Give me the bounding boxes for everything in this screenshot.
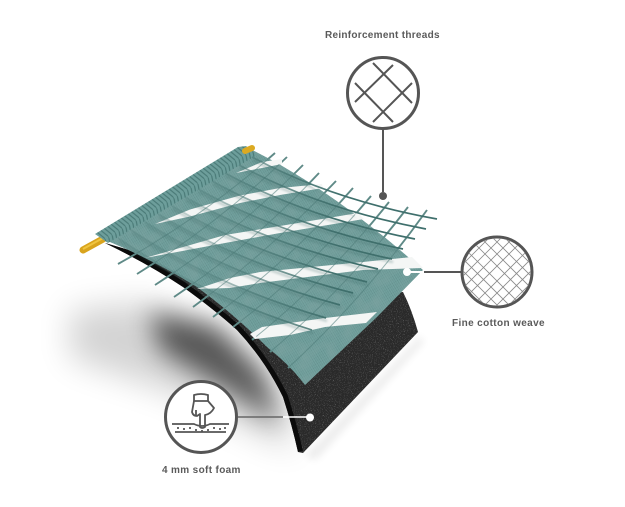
heading: reinforcement threads: Reinforcement threads	[325, 30, 440, 41]
callout: soft foam icon	[166, 382, 314, 452]
thread shadows on cloth	[120, 160, 398, 334]
icon: pressing finger	[192, 394, 214, 428]
callout: reinforcement threads icon	[348, 58, 418, 200]
fold with rod channel	[95, 146, 257, 243]
callout: fine cotton weave icon	[403, 237, 532, 307]
cotton cloth layer	[110, 150, 423, 385]
reinforcement thread ends, cross direction	[118, 153, 427, 368]
heading: fine cotton weave: Fine cotton weave	[452, 318, 545, 329]
heading: soft foam: 4 mm soft foam	[162, 465, 241, 476]
drop shadow under foam	[70, 302, 424, 460]
foam layer	[100, 240, 425, 455]
yellow rod end, left	[83, 238, 103, 250]
reinforcement threads, long direction	[118, 157, 437, 330]
icon: foam surface	[172, 424, 229, 432]
cross threads lying in cloth	[136, 158, 398, 367]
yellow rod end, right	[245, 148, 252, 151]
white stripes in cloth	[145, 159, 423, 339]
